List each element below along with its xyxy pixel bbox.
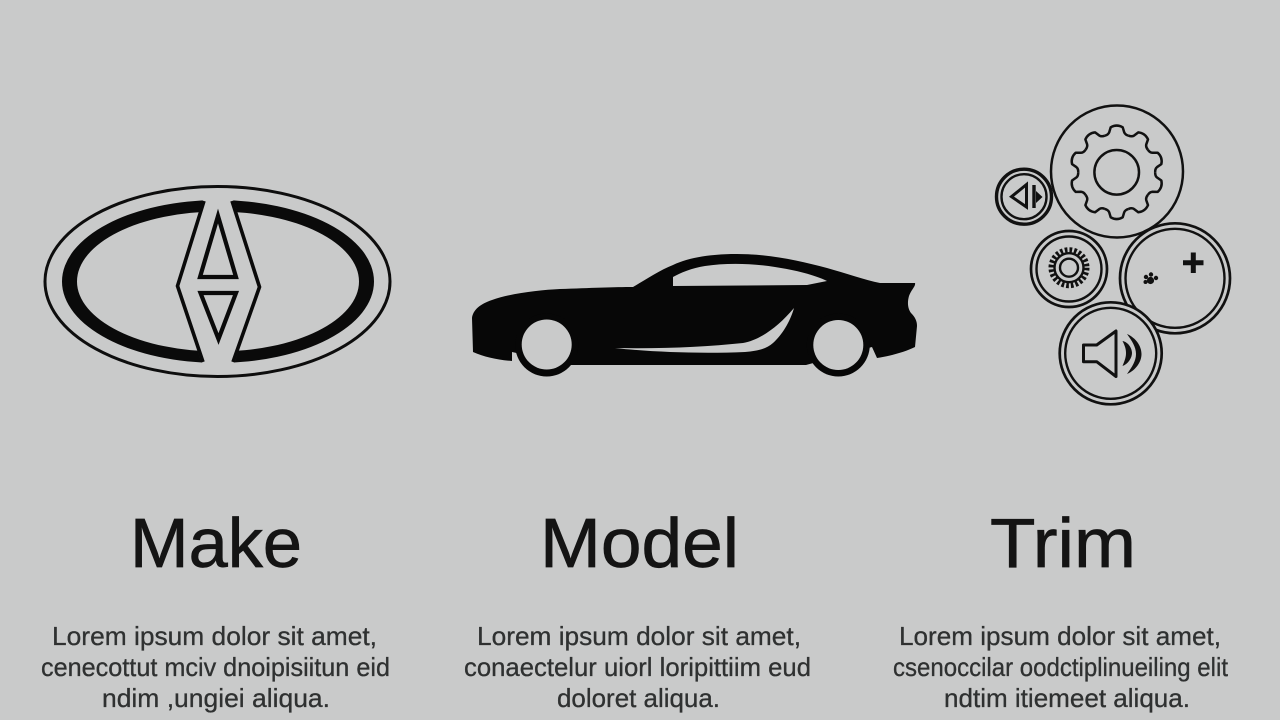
text block: model description: conaectelur uiorl loripittiim eud	[464, 652, 811, 682]
icon: plus circle	[1120, 223, 1230, 333]
text block: model description: doloret aliqua.	[557, 683, 720, 713]
icon: car silhouette	[472, 254, 917, 376]
icon: speaker circle	[1060, 302, 1162, 404]
icon: small arrows circle	[996, 169, 1052, 224]
text block: model description: Lorem ipsum dolor sit amet,	[477, 621, 801, 651]
text block: trim description	[893, 621, 1229, 713]
text block: make description	[41, 621, 390, 713]
text block: trim description: ndtim itiemeet aliqua.	[944, 683, 1190, 713]
text block: make description: Lorem ipsum dolor sit amet,	[52, 621, 377, 651]
panel: model	[464, 254, 917, 713]
heading: trim: Trim	[990, 504, 1136, 582]
text block: trim description: csenoccilar oodctiplinueiling elit	[893, 652, 1229, 682]
icon: make emblem	[45, 186, 390, 376]
text block: make description: ndim ,ungiei aliqua.	[102, 683, 330, 713]
panel: trim	[893, 106, 1230, 713]
text block: make description: cenecottut mciv dnoipisiitun eid	[41, 652, 390, 682]
heading: make: Make	[130, 504, 302, 582]
heading: model: Model	[540, 504, 739, 582]
icon: large gear circle	[1051, 106, 1183, 238]
text block: model description	[464, 621, 811, 713]
icon: sun circle	[1031, 231, 1107, 307]
text block: trim description: Lorem ipsum dolor sit amet,	[899, 621, 1221, 651]
panel: make	[41, 186, 390, 713]
